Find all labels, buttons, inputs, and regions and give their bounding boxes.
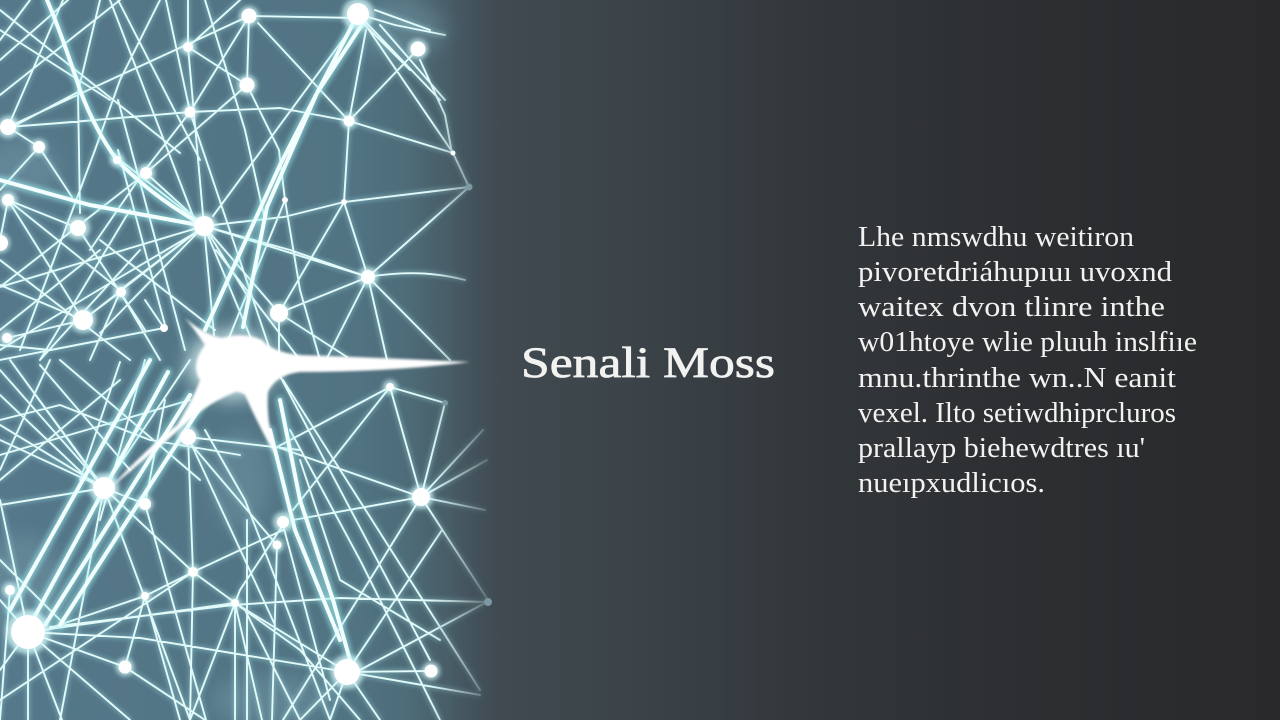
body text block: nueıpxudlicıos. xyxy=(858,468,1045,499)
dim outer nodes xyxy=(442,184,492,606)
network nodes: cores xyxy=(0,3,456,685)
title: Senali Moss xyxy=(521,340,775,387)
body text block xyxy=(858,222,1197,499)
body text block: w01htoye wlie pluuh inslfiıe xyxy=(858,327,1197,358)
body text block: prallayp biehewdtres ıu' xyxy=(858,433,1145,464)
network connection lines xyxy=(0,0,488,720)
network nodes: halos xyxy=(0,0,440,689)
body text block: vexel. Ilto setiwdhiprcluros xyxy=(858,398,1176,429)
body text block: waitex dvon tlinre inthe xyxy=(858,292,1165,323)
bright central hub xyxy=(108,318,470,490)
body text block: Lhe nmswdhu weitiron xyxy=(858,222,1134,253)
panel: neural network artwork xyxy=(0,0,510,720)
teal panel backdrop xyxy=(0,0,510,720)
body text block: mnu.thrinthe wn..N eanit xyxy=(858,363,1176,394)
soft light patches xyxy=(0,0,445,720)
body text block: pivoretdriáhupıuı uvoxnd xyxy=(858,257,1172,288)
